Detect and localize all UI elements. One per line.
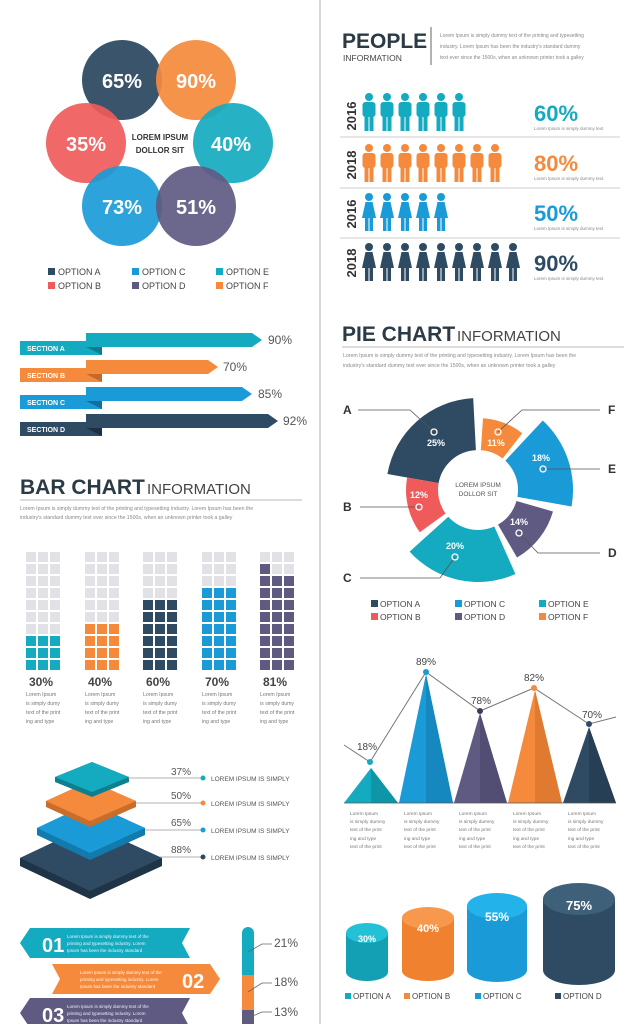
people row 2018 80%: Lorem Ipsum is simply dummy text (534, 176, 604, 181)
cylinder D (543, 883, 615, 985)
pie chart: LOREM IPSUM (455, 482, 501, 489)
cylinder A (346, 923, 388, 981)
legend: cylinders: OPTION B (412, 992, 450, 1001)
panel: section arrows (20, 333, 307, 436)
ribbon 02: Ipsum has been the industry standard (80, 984, 156, 989)
triangle chart: 78% (471, 696, 491, 707)
pie chart: 11% (487, 438, 505, 448)
legend: venn: OPTION D (142, 281, 186, 291)
triangle chart: 82% (524, 673, 544, 684)
cylinder A: 30% (358, 934, 376, 944)
vertical percentage bar: 13% (274, 1005, 298, 1019)
legend: venn: OPTION E (226, 267, 269, 277)
pie chart: 25% (427, 438, 445, 448)
ribbon 01: 01 (42, 935, 64, 957)
people row 2016 60%: 60% (534, 101, 578, 126)
legend: cylinders: OPTION A (353, 992, 391, 1001)
legend: pie: OPTION B (380, 612, 421, 622)
triangle chart: ing and type (350, 836, 376, 842)
bar 60%: Lorem Ipsum (143, 692, 173, 698)
triangle chart: is simply dummy (513, 819, 549, 825)
panel: venn circles (46, 40, 273, 246)
heading: bar chart: BAR CHART (20, 476, 145, 499)
legend: pie: OPTION A (380, 599, 420, 609)
ribbon 03: Lorem Ipsum is simply dummy text of the (67, 1004, 149, 1009)
triangle chart: Lorem Ipsum (459, 811, 487, 817)
bar 81%: text of the print (260, 710, 295, 716)
triangle chart: text of the print (350, 827, 382, 833)
bar 40% (85, 552, 120, 725)
circle 73%: 73% (102, 197, 142, 219)
ribbon 01: printing and typesetting industry. Lorem (67, 941, 146, 946)
section B: 70% (223, 360, 247, 374)
section D (20, 414, 307, 436)
triangle chart: text of the print (404, 827, 436, 833)
cylinder C (467, 893, 527, 982)
triangle chart: 89% (416, 657, 436, 668)
bar 70%: is simply dumy (202, 701, 236, 707)
triangle chart: 70% (582, 710, 602, 721)
triangle chart: is simply dummy (568, 819, 604, 825)
layer labels: LOREM IPSUM IS SIMPLY (211, 828, 290, 835)
triangle chart: Lorem Ipsum (568, 811, 596, 817)
heading: people information (342, 27, 584, 65)
center text: LOREM IPSUM (132, 133, 189, 142)
legend: venn: OPTION B (58, 281, 101, 291)
triangle chart: text of the print (350, 844, 382, 850)
bar 40%: text of the print (85, 710, 120, 716)
ribbon 03: Ipsum has been the industry standard (67, 1018, 143, 1023)
ribbon 02: Lorem Ipsum is simply dummy text of the (80, 970, 162, 975)
circle 73% (82, 166, 162, 246)
pie chart: DOLLOR SIT (459, 491, 497, 498)
bar 81%: is simply dumy (260, 701, 294, 707)
legend: cylinders: OPTION D (563, 992, 602, 1001)
people row 2018 90% (344, 243, 604, 281)
circle 40%: 40% (211, 134, 251, 156)
ribbon 01: Ipsum has been the industry standard (67, 948, 143, 953)
legend: pie: OPTION D (464, 612, 505, 622)
people row 2018 80%: 80% (534, 151, 578, 176)
circle 35% (46, 103, 126, 183)
bar 30%: is simply dumy (26, 701, 60, 707)
section D: 92% (283, 414, 307, 428)
bar 70% (202, 552, 237, 725)
bar 60% (143, 552, 178, 725)
people row 2018 90%: Lorem Ipsum is simply dummy text (534, 276, 604, 281)
bar 30%: Lorem Ipsum (26, 692, 56, 698)
section A: SECTION A (27, 346, 65, 353)
triangle chart: ing and type (568, 836, 594, 842)
cylinder B: 40% (417, 923, 439, 935)
bar 30%: ing and type (26, 719, 54, 725)
panel: numbered ribbons (20, 928, 220, 1024)
people row 2016 50%: 2016 (344, 200, 359, 228)
triangle chart: 18% (357, 742, 377, 753)
pie chart: C (343, 571, 352, 585)
triangle chart: text of the print (459, 827, 491, 833)
bar 81%: 81% (263, 675, 287, 689)
bar 60%: ing and type (143, 719, 171, 725)
section B (20, 360, 247, 382)
circle 90%: 90% (176, 71, 216, 93)
layer labels: LOREM IPSUM IS SIMPLY (211, 855, 290, 862)
people row 2016 60% (344, 93, 604, 131)
heading: people information: text ever since the 1500s, when an unknown printer took a galley (440, 55, 584, 61)
bar 81%: Lorem Ipsum (260, 692, 290, 698)
section C: SECTION C (27, 400, 65, 407)
triangle chart: Lorem Ipsum (513, 811, 541, 817)
cylinder B (402, 907, 454, 981)
heading: bar chart: Lorem Ipsum is simply dummy text of the printing and typesetting industry. Lorem Ipsum has been the (20, 506, 253, 512)
people row 2016 50%: Lorem Ipsum is simply dummy text (534, 226, 604, 231)
heading: bar chart: industry's standard dummy text ever since the 1500s, when an unknown printer took a galley (20, 515, 233, 521)
panel: stacked layers (20, 762, 290, 899)
center text (132, 133, 189, 155)
pie chart: E (608, 462, 616, 476)
triangle chart: text of the print (404, 844, 436, 850)
heading: bar chart: INFORMATION (147, 481, 251, 498)
legend: cylinders: OPTION C (483, 992, 522, 1001)
heading: people information: INFORMATION (343, 53, 402, 63)
bar 40%: 40% (88, 675, 112, 689)
people row 2016 50%: 50% (534, 201, 578, 226)
legend: venn: OPTION F (226, 281, 269, 291)
people row 2018 90%: 2018 (344, 249, 359, 277)
layer labels: 88% (171, 845, 191, 856)
layer labels: LOREM IPSUM IS SIMPLY (211, 776, 290, 783)
bar 70%: ing and type (202, 719, 230, 725)
pie chart: D (608, 546, 617, 560)
bar 70%: 70% (205, 675, 229, 689)
ribbon 03 (20, 998, 190, 1024)
triangle chart: text of the print (513, 827, 545, 833)
triangle chart: text of the print (513, 844, 545, 850)
people row 2016 50% (344, 193, 604, 231)
section A (20, 333, 292, 355)
circle 51% (156, 166, 236, 246)
ribbon 01 (20, 928, 190, 958)
bar 40%: is simply dumy (85, 701, 119, 707)
layer labels: 65% (171, 818, 191, 829)
legend: pie: OPTION F (548, 612, 588, 622)
bar chart: square grids (26, 552, 295, 725)
triangle chart: text of the print (568, 827, 600, 833)
ribbon 01: Lorem Ipsum is simply dummy text of the (67, 934, 149, 939)
heading: pie chart: industry's standard dummy text ever since the 1500s, when an unknown printer took a galley (343, 363, 556, 369)
bar 30%: text of the print (26, 710, 61, 716)
ribbon 02: printing and typesetting industry. Lorem (80, 977, 159, 982)
section A: 90% (268, 333, 292, 347)
bar 40%: Lorem Ipsum (85, 692, 115, 698)
legend: venn (48, 267, 269, 291)
heading: people information: Lorem Ipsum is simply dummy text of the printing and typesetting (440, 33, 584, 39)
layer navy (20, 825, 162, 899)
triangle chart: is simply dummy (459, 819, 495, 825)
people row 2016 60%: 2016 (344, 102, 359, 130)
heading: pie chart (342, 323, 624, 369)
section C (20, 387, 282, 409)
people row 2018 80% (344, 144, 604, 182)
ribbon 03: printing and typesetting industry. Lorem (67, 1011, 146, 1016)
vertical percentage bar (242, 927, 298, 1024)
triangle chart: text of the print (459, 844, 491, 850)
triangle chart: text of the print (568, 844, 600, 850)
people row 2018 80%: 2018 (344, 151, 359, 179)
circle 90% (156, 40, 236, 120)
circle 40% (193, 103, 273, 183)
triangle chart: Lorem Ipsum (350, 811, 378, 817)
legend: venn: OPTION A (58, 267, 101, 277)
heading: pie chart: Lorem Ipsum is simply dummy text of the printing and typesetting industry. Lorem Ipsum has been the (343, 353, 576, 359)
people row 2018 90%: 90% (534, 251, 578, 276)
bar 60%: text of the print (143, 710, 178, 716)
heading: people information: PEOPLE (342, 30, 427, 53)
section B: SECTION B (27, 373, 65, 380)
legend: pie: OPTION E (548, 599, 589, 609)
circle 65%: 65% (102, 71, 142, 93)
pie chart: 14% (510, 517, 528, 527)
layer orange (46, 781, 136, 827)
pie chart: 20% (446, 541, 464, 551)
vertical percentage bar: 18% (274, 975, 298, 989)
triangle chart (344, 657, 616, 850)
pie chart: F (608, 403, 615, 417)
cylinder D: 75% (566, 898, 592, 913)
ribbon 02: 02 (182, 971, 204, 993)
bar 70%: text of the print (202, 710, 237, 716)
heading: pie chart: INFORMATION (457, 328, 561, 345)
pie chart (343, 398, 617, 585)
bar 81%: ing and type (260, 719, 288, 725)
heading: people information: industry. Lorem Ipsum has been the industry's standard dummy (440, 44, 581, 50)
legend: cylinders (345, 992, 602, 1001)
heading: pie chart: PIE CHART (342, 323, 455, 346)
circle 35%: 35% (66, 134, 106, 156)
cylinder C: 55% (485, 910, 509, 924)
bar 40%: ing and type (85, 719, 113, 725)
bar 30%: 30% (29, 675, 53, 689)
layer labels: LOREM IPSUM IS SIMPLY (211, 801, 290, 808)
bar 81% (260, 552, 295, 725)
bar 30% (26, 552, 61, 725)
legend: pie (371, 599, 589, 622)
bar 60%: 60% (146, 675, 170, 689)
layer labels (128, 767, 290, 862)
section D: SECTION D (27, 427, 65, 434)
circle 65% (82, 40, 162, 120)
heading: bar chart (20, 476, 302, 521)
pie chart: A (343, 403, 352, 417)
people row 2016 60%: Lorem Ipsum is simply dummy text (534, 126, 604, 131)
vertical percentage bar: 21% (274, 936, 298, 950)
legend: pie: OPTION C (464, 599, 505, 609)
circle 51%: 51% (176, 197, 216, 219)
layer labels: 37% (171, 767, 191, 778)
cylinders (346, 883, 615, 985)
triangle chart: ing and type (404, 836, 430, 842)
triangle chart: ing and type (513, 836, 539, 842)
triangle chart: Lorem Ipsum (404, 811, 432, 817)
ribbon 02 (52, 964, 220, 994)
layer blue (37, 803, 145, 860)
bar 60%: is simply dumy (143, 701, 177, 707)
triangle chart: is simply dummy (404, 819, 440, 825)
legend: venn: OPTION C (142, 267, 186, 277)
triangle chart: ing and type (459, 836, 485, 842)
center text: DOLLOR SIT (136, 146, 184, 155)
layer teal (55, 762, 129, 797)
pie chart: 18% (532, 453, 550, 463)
layer labels: 50% (171, 791, 191, 802)
bar 70%: Lorem Ipsum (202, 692, 232, 698)
triangle chart: is simply dummy (350, 819, 386, 825)
pie chart: 12% (410, 490, 428, 500)
pie chart: B (343, 500, 352, 514)
section C: 85% (258, 387, 282, 401)
